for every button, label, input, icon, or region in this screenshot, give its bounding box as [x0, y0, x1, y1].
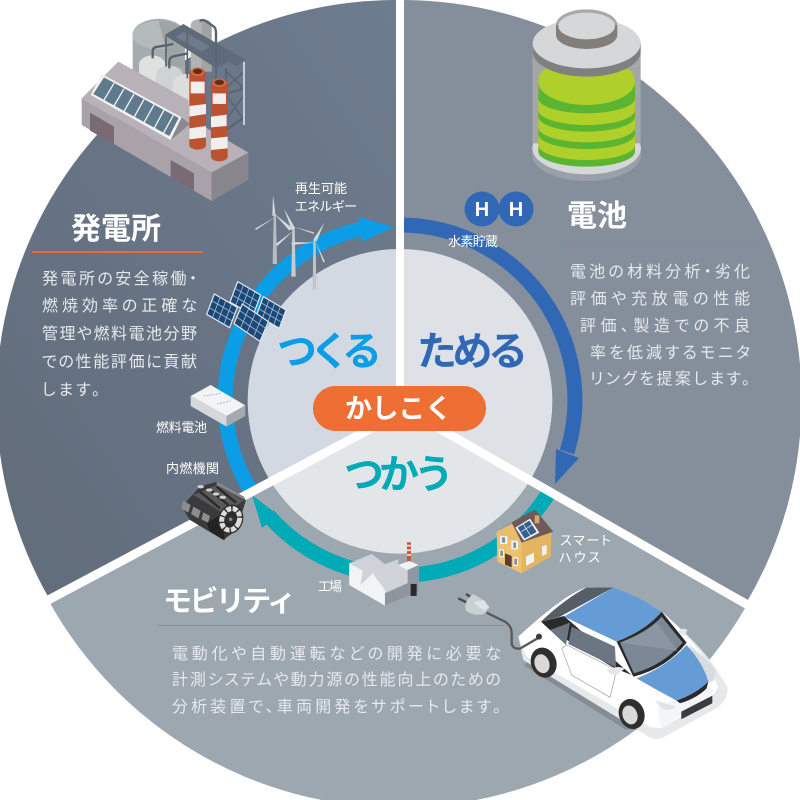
text: mobility description: 分析装置で、車両開発をサポートします。 — [172, 698, 501, 716]
icon: power plant — [82, 19, 248, 201]
chimney 2 — [211, 78, 228, 161]
text: power plant description: 管理や燃料電池分野 — [42, 325, 197, 343]
text: power plant description: 発電所の安全稼働・ — [42, 270, 197, 288]
icon: electric car — [458, 587, 728, 739]
icon: hydrogen molecule: H — [509, 199, 523, 221]
label: つくる: つくる — [277, 330, 382, 374]
text: mobility description: 計測システムや動力源の性能向上のための — [172, 671, 501, 689]
pill: かしこく — [313, 386, 486, 431]
text: battery description — [570, 263, 750, 388]
icon: solar panels — [207, 282, 286, 341]
label: renewable energy — [295, 181, 357, 214]
icon: smart house — [495, 509, 553, 573]
label: smart house — [558, 533, 611, 565]
underline: mobility — [157, 625, 505, 626]
label: factory: 工場 — [318, 579, 342, 594]
chimney 1 — [189, 67, 206, 150]
pill: かしこく: かしこく — [345, 394, 452, 424]
heading: power plant: 発電所 — [71, 213, 161, 246]
text: battery description: 評価や充放電の性能 — [570, 290, 750, 308]
underline: power plant — [32, 251, 203, 253]
text: battery description: 電池の材料分析・劣化 — [570, 263, 750, 281]
icon: hydrogen molecule: H — [475, 199, 489, 221]
icon: factory — [349, 542, 419, 606]
white dividers — [0, 0, 760, 636]
icon: battery — [532, 9, 641, 181]
central circle — [248, 249, 552, 554]
label: fuel cell: 燃料電池 — [156, 420, 207, 435]
text: power plant description: での性能評価に貢献 — [42, 353, 197, 371]
label: internal combustion: 内燃機関 — [166, 461, 219, 476]
icon: wind turbines — [255, 195, 325, 289]
text: battery description: 評価、製造での不良 — [580, 317, 750, 335]
label: つかう: つかう — [344, 453, 454, 497]
label: renewable energy: 再生可能 — [295, 181, 347, 196]
heading: mobility: モビリティ — [163, 585, 296, 618]
text: battery description: 率を低減するモニタ — [590, 344, 750, 362]
label: hydrogen storage: 水素貯蔵 — [448, 234, 498, 249]
text: mobility description: 電動化や自動運転などの開発に必要な — [172, 645, 501, 663]
icon: hydrogen molecule — [464, 192, 534, 226]
text: power plant description: します。 — [42, 381, 100, 399]
heading: battery: 電池 — [567, 200, 627, 233]
text: power plant description: 燃焼効率の正確な — [42, 297, 197, 315]
panel: battery sector — [400, 0, 800, 600]
underline: battery — [563, 241, 760, 242]
panel: power plant sector — [0, 0, 400, 600]
label: smart house: スマート — [560, 533, 611, 548]
label: smart house: ハウス — [558, 550, 600, 565]
panel: mobility sector — [50, 410, 748, 800]
icon: fuel cell — [191, 385, 245, 427]
arrow: ためる ring — [404, 225, 579, 484]
label: ためる: ためる — [417, 330, 528, 374]
label: renewable energy: エネルギー — [295, 199, 357, 214]
text: mobility description — [172, 645, 501, 716]
arrow: つかう ring — [252, 478, 557, 575]
text: battery description: リングを提案します。 — [590, 370, 750, 388]
text: power plant description — [42, 270, 197, 399]
icon: engine — [181, 482, 247, 540]
arrow: つくる ring — [225, 217, 394, 491]
